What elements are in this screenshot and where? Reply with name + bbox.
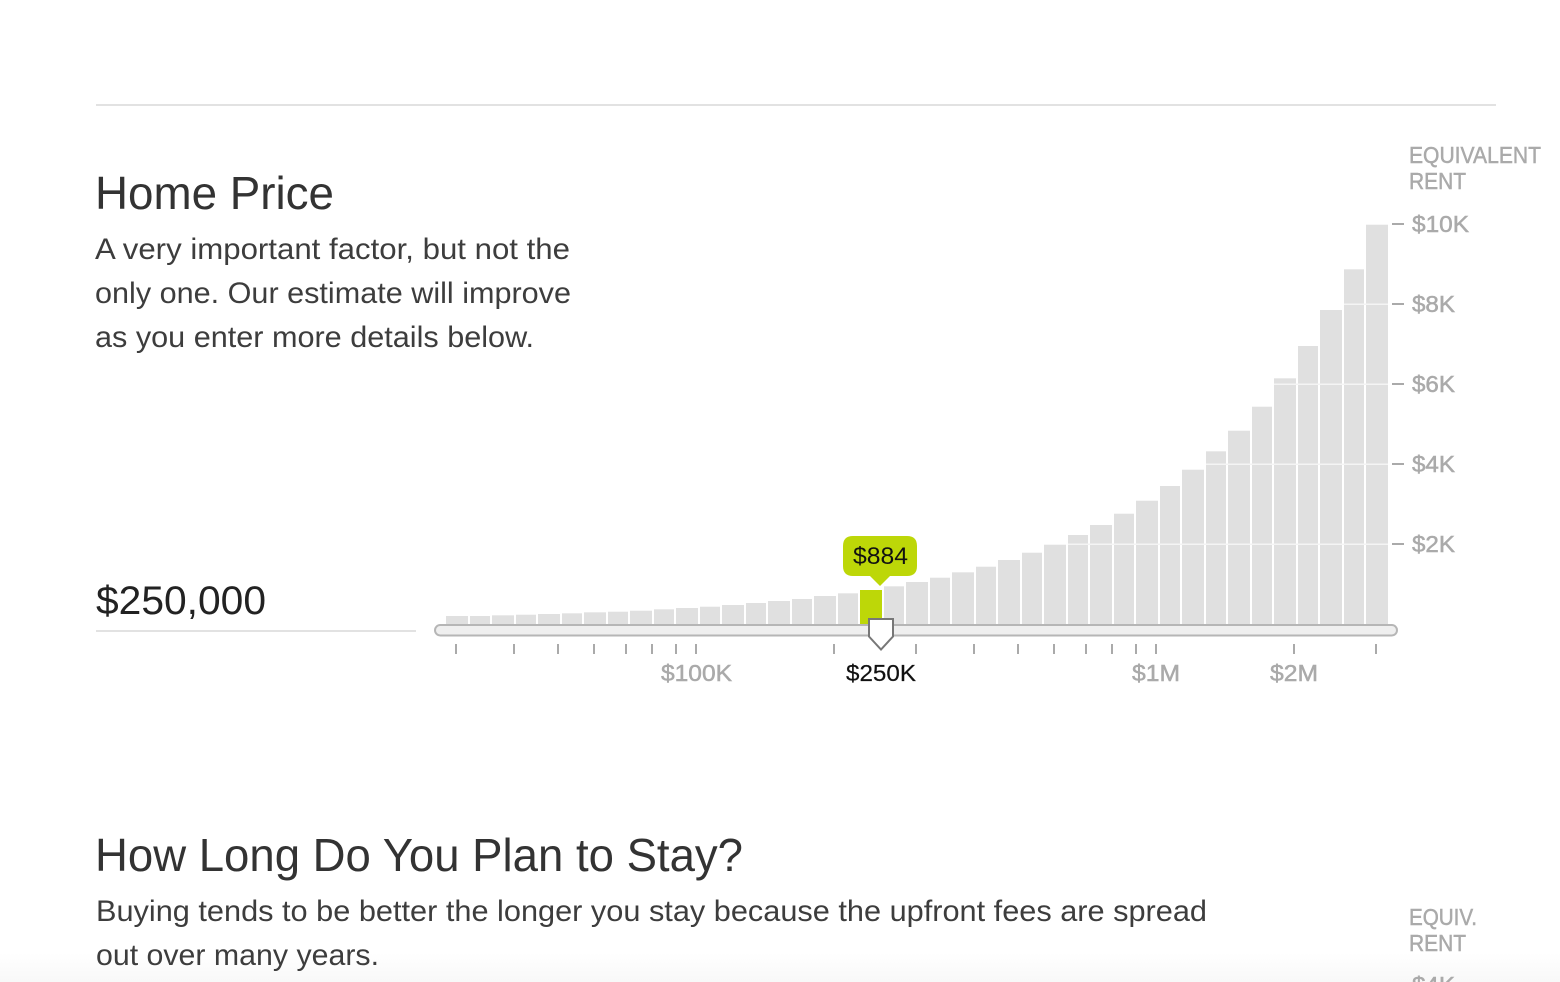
text block: home price description: as you enter more details below. [95, 321, 534, 354]
axis title: equiv. rent: RENT [1409, 930, 1466, 956]
text block: stay description [96, 895, 1207, 972]
axis title: equiv. rent [1409, 904, 1477, 956]
bar chart: rent by home price [446, 225, 1388, 625]
heading: How Long Do You Plan to Stay?: How Long Do You Plan to Stay? [95, 829, 743, 881]
tooltip: $884: $884 [853, 543, 908, 570]
rent axis: ticks and labels: $10K [1412, 211, 1470, 237]
text block: stay description: Buying tends to be better the longer you stay because the upfront fees are spread [96, 895, 1207, 928]
slider handle [869, 619, 893, 650]
highlighted bar: selected price [860, 590, 882, 625]
text block: home price description [95, 233, 571, 354]
text block: home price description: only one. Our estimate will improve [95, 277, 571, 310]
price axis labels: $1M [1132, 660, 1180, 686]
axis title: equivalent rent: EQUIVALENT [1409, 142, 1541, 168]
price axis labels: $250K [846, 660, 917, 686]
price axis labels [661, 660, 1318, 686]
price axis ticks [456, 644, 1376, 654]
heading: Home Price: Home Price [95, 167, 334, 219]
slider track [435, 625, 1397, 636]
rent axis: ticks and labels: $4K [1412, 451, 1456, 477]
rent axis: ticks and labels: $2K [1412, 531, 1456, 557]
rent axis: ticks and labels [1392, 211, 1470, 557]
text block: stay description: out over many years. [96, 939, 379, 972]
text block: home price description: A very important factor, but not the [95, 233, 570, 266]
price axis labels: $100K [661, 660, 733, 686]
home price value input: $250,000 [96, 579, 266, 623]
axis title: equiv. rent: EQUIV. [1409, 904, 1477, 930]
tooltip: $884 [843, 536, 917, 586]
axis title: equivalent rent [1409, 142, 1541, 194]
rent axis: ticks and labels: $6K [1412, 371, 1456, 397]
axis title: equivalent rent: RENT [1409, 168, 1466, 194]
rent axis: ticks and labels: $8K [1412, 291, 1456, 317]
price axis labels: $2M [1270, 660, 1318, 686]
